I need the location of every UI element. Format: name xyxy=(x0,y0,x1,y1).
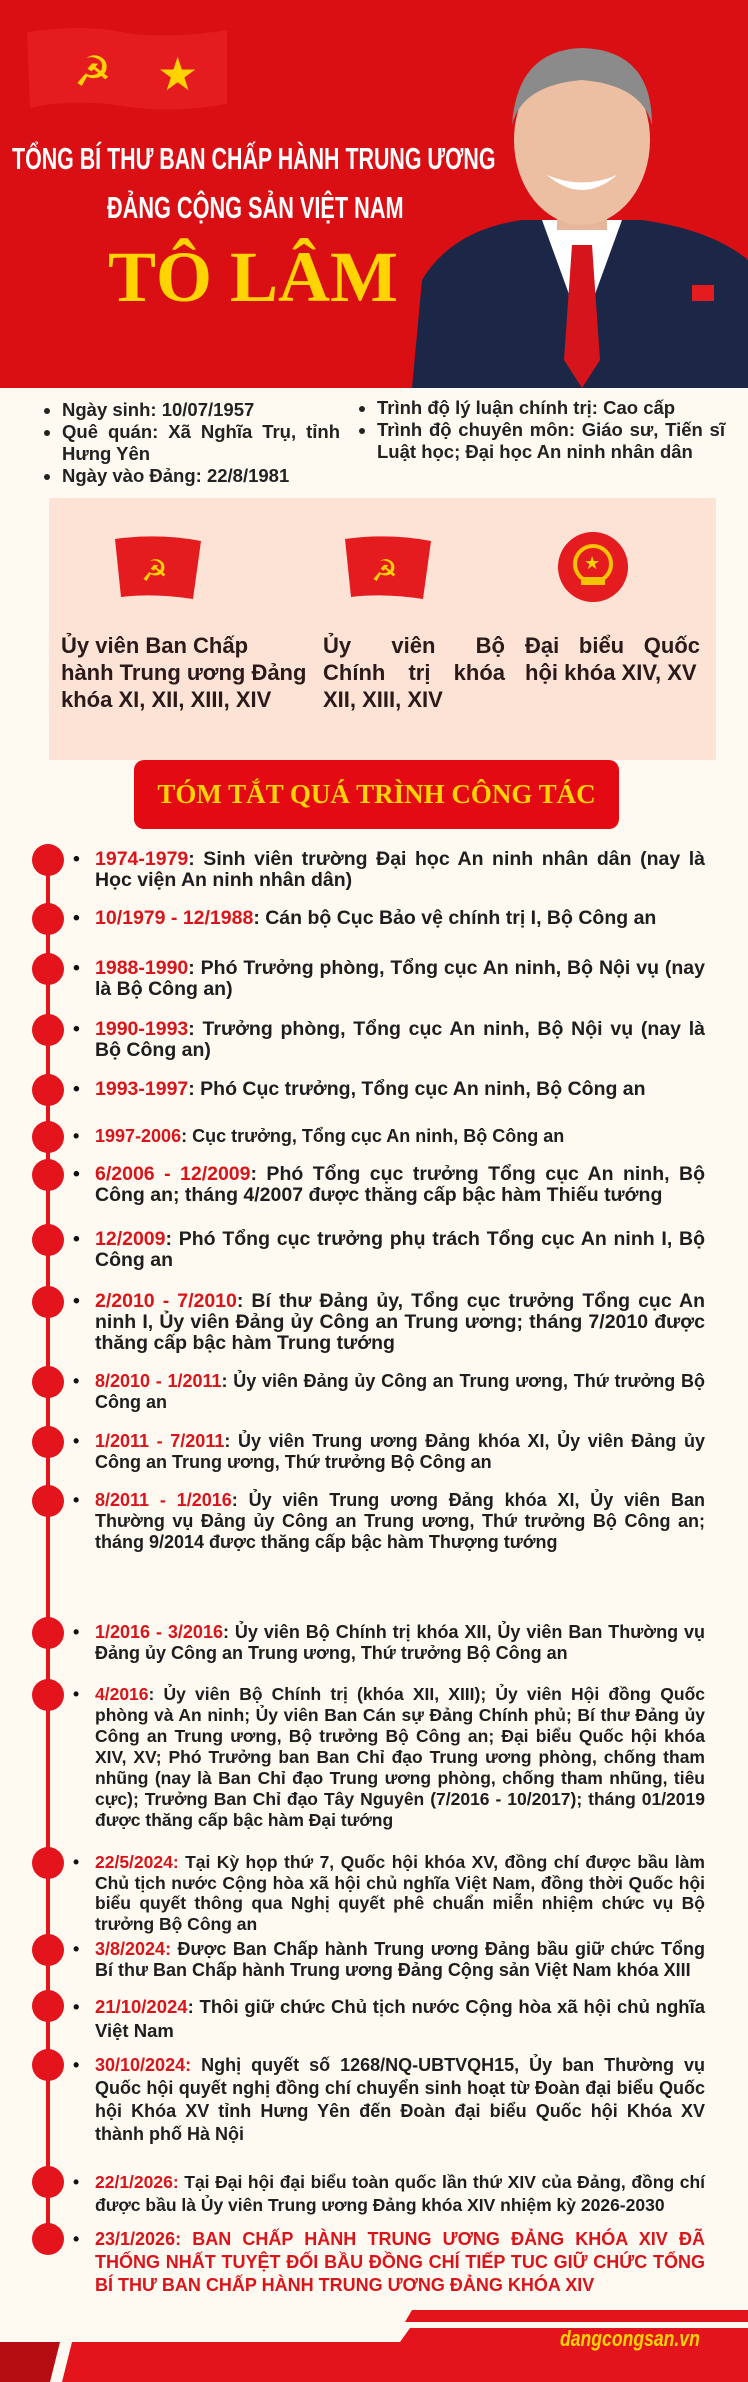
timeline: 1/2011 - 7/2011: Ủy viên Trung ương Đảng khóa XI, Ủy viên Đảng ủy Công an Trung ương, Thứ trưởng Bộ Công an xyxy=(95,1431,705,1472)
timeline: 22/5/2024: Tại Kỳ họp thứ 7, Quốc hội khóa XV, đồng chí được bầu làm Chủ tịch nước Cộng hòa xã hội chủ nghĩa Việt Nam, đồng thời Quốc hội biểu quyết thông qua Nghị quyết phê chuẩn miễn nhiệm chức vụ Bộ trưởng Bộ Công an xyxy=(95,1852,705,1934)
footer bands xyxy=(0,2310,748,2382)
timeline: 1/2016 - 3/2016: Ủy viên Bộ Chính trị khóa XII, Ủy viên Ban Thường vụ Đảng ủy Công an Trung ương, Thứ trưởng Bộ Công an xyxy=(95,1622,705,1663)
icon: national emblem: ★ xyxy=(584,553,600,574)
info left column: Ngày sinh: 10/07/1957 xyxy=(62,399,254,420)
info left column xyxy=(44,399,340,486)
timeline: 1997-2006: Cục trưởng, Tổng cục An ninh, Bộ Công an xyxy=(95,1126,564,1146)
icon: party flag top-left xyxy=(27,28,227,110)
info left column: Ngày vào Đảng: 22/8/1981 xyxy=(62,465,289,486)
text: col 1 xyxy=(61,632,306,712)
timeline: 21/10/2024: Thôi giữ chức Chủ tịch nước Cộng hòa xã hội chủ nghĩa Việt Nam xyxy=(95,1996,705,2041)
panel: positions xyxy=(49,498,716,760)
text: col 1: Ủy viên Ban Chấp xyxy=(61,633,248,658)
timeline: 6/2006 - 12/2009: Phó Tổng cục trưởng Tổng cục An ninh, Bộ Công an; tháng 4/2007 được thăng cấp bậc hàm Thiếu tướng xyxy=(95,1163,705,1206)
timeline: 1990-1993: Trưởng phòng, Tổng cục An ninh, Bộ Nội vụ (nay là Bộ Công an) xyxy=(95,1018,705,1061)
icon: party flag 1 xyxy=(115,536,201,599)
timeline: 2/2010 - 7/2010: Bí thư Đảng ủy, Tổng cục trưởng Tổng cục An ninh I, Ủy viên Đảng ủy Công an Trung ương; tháng 7/2010 được thăng cấp bậc hàm Trung tướng xyxy=(95,1290,705,1354)
info right column: Trình độ chuyên môn: Giáo sư, Tiến sĩ Luật học; Đại học An ninh nhân dân xyxy=(377,419,725,462)
icon: party flag 2 xyxy=(345,536,431,599)
icon: party flag top-left: ★ xyxy=(157,47,198,101)
timeline: 22/1/2026: Tại Đại hội đại biểu toàn quốc lần thứ XIV của Đảng, đồng chí được bầu là Ủy viên Trung ương Đảng khóa XIV nhiệm kỳ 2026-2030 xyxy=(95,2172,705,2215)
text: 23/1/2026: BAN CHẤP HÀNH TRUNG ƯƠNG ĐẢNG KHÓA XIV ĐÃ THỐNG NHẤT TUYỆT ĐỐI BẦU ĐỒNG CHÍ TIẾP TUC GIỮ CHỨC TỔNG BÍ THƯ BAN CHẤP HÀNH TRUNG ƯƠNG ĐẢNG KHÓA XIV xyxy=(95,2229,705,2295)
title lines: TỔNG BÍ THƯ BAN CHẤP HÀNH TRUNG ƯƠNG xyxy=(12,141,496,176)
timeline xyxy=(32,844,706,2295)
icon: national emblem xyxy=(558,532,628,602)
footer source: dangcongsan.vn xyxy=(560,2326,700,2351)
timeline: 10/1979 - 12/1988: Cán bộ Cục Bảo vệ chính trị I, Bộ Công an xyxy=(95,907,656,929)
info right column xyxy=(359,397,726,462)
timeline: 1974-1979: Sinh viên trường Đại học An ninh nhân dân (nay là Học viện An ninh nhân dân) xyxy=(95,848,705,891)
timeline: 8/2011 - 1/2016: Ủy viên Trung ương Đảng khóa XI, Ủy viên Ban Thường vụ Đảng ủy Công an Trung ương, Thứ trưởng Bộ Công an; tháng 9/2014 được thăng cấp bậc hàm Thượng tướng xyxy=(95,1490,705,1552)
timeline: 12/2009: Phó Tổng cục trưởng phụ trách Tổng cục An ninh I, Bộ Công an xyxy=(95,1228,705,1271)
timeline: 3/8/2024: Được Ban Chấp hành Trung ương Đảng bầu giữ chức Tổng Bí thư Ban Chấp hành Trung ương Đảng Cộng sản Việt Nam khóa XIII xyxy=(95,1939,705,1980)
info left column: Quê quán: Xã Nghĩa Trụ, tỉnh Hưng Yên xyxy=(62,421,340,464)
text: col 2: Ủy viên Bộ Chính trị khóa XII, XIII, XIV xyxy=(323,633,505,712)
header background xyxy=(0,0,748,388)
timeline: 8/2010 - 1/2011: Ủy viên Đảng ủy Công an Trung ương, Thứ trưởng Bộ Công an xyxy=(95,1371,705,1412)
icon: party flag 2: ☭ xyxy=(371,554,398,589)
header background: ĐẢNG CỘNG SẢN VIỆT NAM xyxy=(107,190,404,225)
timeline line xyxy=(46,860,50,2240)
section banner: TÓM TẮT QUÁ TRÌNH CÔNG TÁC xyxy=(157,779,596,809)
timeline: 30/10/2024: Nghị quyết số 1268/NQ-UBTVQH15, Ủy ban Thường vụ Quốc hội quyết nghị đồng chí chuyển sinh hoạt từ Đoàn đại biểu Quốc hội Khóa XV tỉnh Hưng Yên đến Đoàn đại biểu Quốc hội Khóa XV thành phố Hà Nội xyxy=(95,2055,705,2144)
section banner xyxy=(134,760,619,829)
timeline: 4/2016: Ủy viên Bộ Chính trị (khóa XII, XIII); Ủy viên Hội đồng Quốc phòng và An ninh; Ủy viên Ban Cán sự Đảng Chính phủ; Bí thư Đảng ủy Công an Trung ương, Bộ trưởng Bộ Công an; Đại biểu Quốc hội khóa XIV, XV; Phó Trưởng ban Ban Chỉ đạo Trung ương phòng, chống tham nhũng (nay là Ban Chỉ đạo Trung ương phòng, chống tham nhũng, tiêu cực); Trưởng Ban Chỉ đạo Tây Nguyên (7/2016 - 10/2017); tháng 01/2019 được thăng cấp bậc hàm Đại tướng xyxy=(95,1684,705,1830)
info right column: Trình độ lý luận chính trị: Cao cấp xyxy=(377,397,675,418)
name: TÔ LÂM xyxy=(108,237,398,317)
timeline: 1993-1997: Phó Cục trưởng, Tổng cục An ninh, Bộ Công an xyxy=(95,1078,646,1100)
portrait xyxy=(412,48,748,388)
icon: party flag top-left: ☭ xyxy=(74,47,112,96)
timeline: 1988-1990: Phó Trưởng phòng, Tổng cục An ninh, Bộ Nội vụ (nay là Bộ Công an) xyxy=(95,957,705,1000)
text: col 3: Đại biểu Quốc hội khóa XIV, XV xyxy=(525,633,700,685)
text: col 1: khóa XI, XII, XIII, XIV xyxy=(61,687,271,712)
text: col 1: hành Trung ương Đảng xyxy=(61,660,306,685)
icon: party flag 1: ☭ xyxy=(141,554,168,589)
